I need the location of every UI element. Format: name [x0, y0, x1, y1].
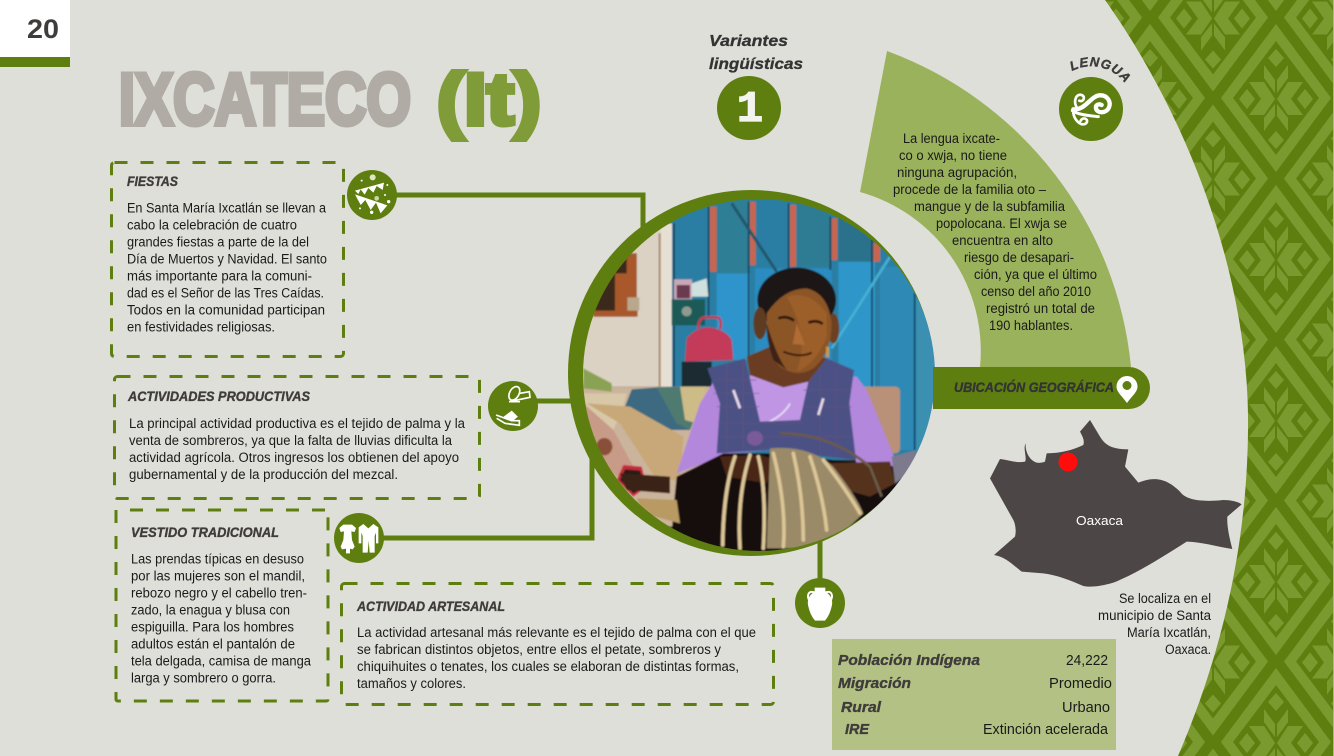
- panel: lengua: popolocana. El xwja se: [936, 216, 1067, 231]
- plaster wall: [583, 228, 662, 388]
- data table: [832, 639, 1116, 750]
- location note: Se localiza en el: [1119, 591, 1211, 606]
- panel: fiestas: más importante para la comuni-: [127, 268, 312, 284]
- panel: vestido tradicional: [116, 510, 328, 701]
- icon: traditional clothing: [334, 513, 384, 563]
- panel: lengua: La lengua ixcate-: [903, 131, 1000, 146]
- data table: IRE: [845, 722, 870, 738]
- panel: actividad artesanal: ACTIVIDAD ARTESANAL: [356, 599, 505, 614]
- location note: [1098, 591, 1211, 657]
- ubicacion geografica bar: UBICACIÓN GEOGRÁFICA: [954, 380, 1114, 395]
- panel: vestido tradicional: adultos están el pantalón de: [131, 636, 295, 652]
- data table: Rural: [841, 700, 882, 716]
- icon: fiestas bunting: [347, 170, 397, 220]
- panel: lengua: [860, 51, 1131, 367]
- location note: municipio de Santa: [1098, 608, 1211, 623]
- panel: actividades productivas: venta de sombreros, ya que la falta de lluvias dificulta la: [129, 433, 452, 448]
- panel: actividad artesanal: [342, 584, 774, 704]
- palm fronds: [767, 448, 863, 548]
- data table: Promedio: [1049, 676, 1112, 692]
- pink bag: [685, 327, 733, 362]
- woven textile pattern band: [1105, 0, 1333, 756]
- panel: fiestas: dad es el Señor de las Tres Caídas.: [127, 286, 324, 300]
- panel: lengua: co o xwja, no tiene: [899, 148, 1007, 163]
- panel: actividad artesanal: La actividad artesanal más relevante es el tejido de palma con el que: [357, 625, 756, 640]
- neck and face: [747, 347, 827, 387]
- title: IXCATECO: [119, 60, 411, 140]
- panel: vestido tradicional: zado, la enagua y blusa con: [131, 602, 290, 618]
- panel: fiestas: Día de Muertos y Navidad. El santo: [127, 252, 327, 266]
- panel: lengua: censo del año 2010: [981, 284, 1091, 299]
- panel: actividades productivas: [114, 376, 480, 498]
- icon: hands: [488, 381, 538, 431]
- panel: fiestas: cabo la celebración de cuatro: [127, 218, 297, 232]
- panel: actividades productivas: actividad agrícola. Otros ingresos los obtienen del apoyo: [129, 450, 459, 465]
- data table: 24,222: [1066, 653, 1108, 669]
- panel: vestido tradicional: Las prendas típicas en desuso: [131, 552, 304, 566]
- connector lines: [375, 195, 820, 585]
- blue door: [672, 197, 940, 460]
- sofa and blankets: [580, 387, 713, 527]
- panel: lengua: ción, ya que el último: [974, 267, 1097, 282]
- panel: fiestas: FIESTAS: [127, 174, 178, 189]
- panel: fiestas: [112, 162, 344, 356]
- panel: lengua: registró un total de: [986, 301, 1095, 316]
- panel: lengua: mangue y de la subfamilia: [914, 199, 1065, 214]
- title: (It): [437, 60, 541, 140]
- page number tab: 20: [27, 14, 59, 44]
- data table: Migración: [838, 676, 911, 692]
- panel: vestido tradicional: rebozo negro y el cabello tren-: [131, 586, 307, 600]
- language variants counter: Variantes: [709, 33, 788, 50]
- data table: Extinción acelerada: [983, 722, 1109, 738]
- panel: fiestas: grandes fiestas a parte de la del: [127, 234, 309, 250]
- panel: actividades productivas: ACTIVIDADES PRODUCTIVAS: [127, 389, 310, 404]
- panel: vestido tradicional: por las mujeres son el mandil,: [131, 568, 305, 584]
- panel: actividades productivas: gubernamental y de la producción del mezcal.: [129, 467, 398, 482]
- panel: fiestas: Todos en la comunidad participan: [127, 302, 325, 318]
- panel: actividad artesanal: se fabrican distintos objetos, entre ellos el petate, sombreros y: [357, 642, 721, 657]
- panel: actividades productivas: La principal actividad productiva es el tejido de palma y la: [129, 416, 465, 431]
- panel: lengua: encuentra en alto: [952, 233, 1053, 248]
- data table: Población Indígena: [838, 653, 980, 669]
- location note: Oaxaca.: [1165, 642, 1211, 657]
- shelf items: [672, 299, 705, 325]
- panel: vestido tradicional: larga y sombrero o gorra.: [131, 670, 276, 686]
- lap and hands: [670, 453, 897, 560]
- language variants counter: 1: [737, 85, 763, 135]
- panel: actividad artesanal: tamaños y colores.: [357, 676, 466, 691]
- map: Oaxaca: [990, 420, 1242, 587]
- panel: vestido tradicional: VESTIDO TRADICIONAL: [131, 525, 279, 540]
- page number tab: [0, 0, 70, 67]
- shirt: [677, 377, 898, 473]
- language variants counter: lingüísticas: [709, 56, 803, 73]
- icon: clay jar: [795, 578, 845, 628]
- right edge strip: [1333, 0, 1334, 756]
- photo: woman weaving palm: [568, 190, 940, 560]
- panel: lengua: ninguna agrupación,: [897, 165, 1017, 180]
- apron: [707, 358, 856, 460]
- icon: lengua swirl: [1059, 57, 1130, 141]
- map: Oaxaca: Oaxaca: [1076, 513, 1124, 528]
- language variants counter: [709, 33, 803, 140]
- panel: lengua: 190 hablantes.: [989, 318, 1073, 333]
- panel: fiestas: En Santa María Ixcatlán se llevan a: [127, 200, 326, 216]
- panel: lengua: procede de la familia oto –: [893, 182, 1046, 197]
- icon: lengua swirl: LENGUA: [1070, 57, 1130, 82]
- panel: lengua: riesgo de desapari-: [964, 250, 1074, 265]
- data table: Urbano: [1062, 700, 1110, 716]
- ubicacion geografica bar: [933, 367, 1150, 409]
- panel: fiestas: en festividades religiosas.: [127, 320, 275, 334]
- panel: actividad artesanal: chiquihuites o tenates, los cuales se elaboran de distintas formas,: [357, 659, 739, 674]
- panel: vestido tradicional: espiguilla. Para los hombres: [131, 620, 294, 634]
- panel: vestido tradicional: tela delgada, camisa de manga: [131, 654, 311, 668]
- location note: María Ixcatlán,: [1127, 625, 1211, 640]
